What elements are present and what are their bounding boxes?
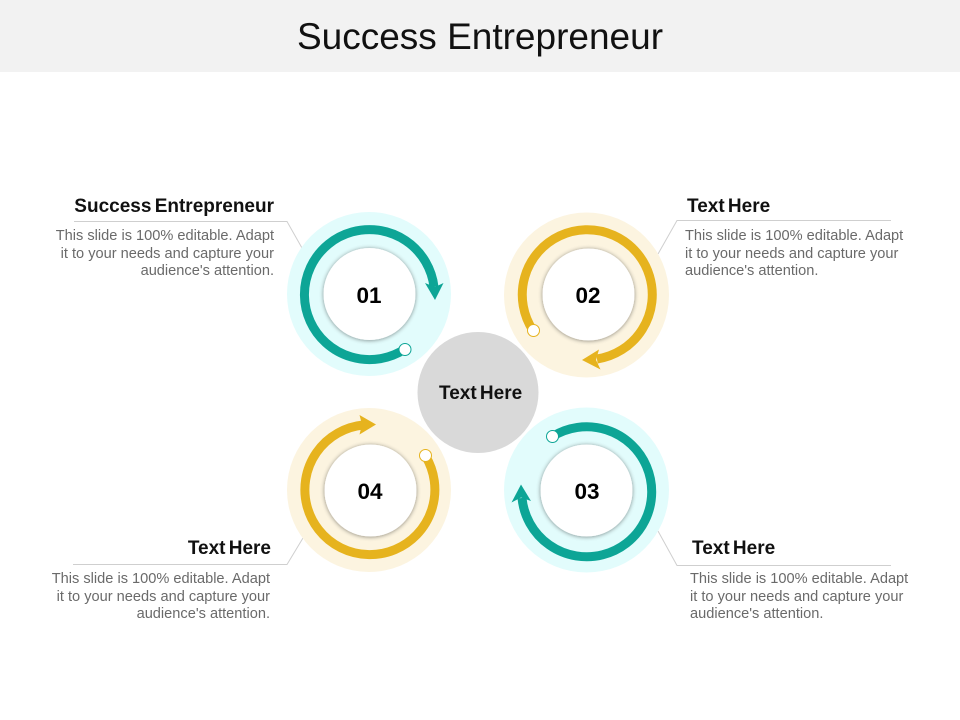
inner disc 03	[540, 444, 632, 536]
body: bottom left: This slide is 100% editable. Adapt	[52, 571, 270, 587]
body: top left: audience's attention.	[141, 263, 274, 279]
text block: top left	[56, 196, 274, 279]
arrow ring 03	[512, 427, 652, 557]
leader line: top right	[658, 220, 891, 254]
body: top right	[685, 228, 904, 279]
number 04: 04	[357, 479, 383, 504]
body: bottom left: audience's attention.	[137, 606, 270, 622]
ring dot 01	[399, 344, 411, 356]
inner disc 01	[324, 248, 416, 340]
step 02 circle	[504, 212, 669, 378]
text block: bottom left	[52, 538, 271, 622]
center circle	[418, 332, 538, 453]
ring dot 02	[528, 324, 540, 336]
body: bottom right: it to your needs and capture your	[690, 588, 903, 604]
heading: top right: Text Here	[687, 196, 770, 217]
body: bottom right: audience's attention.	[690, 606, 823, 622]
body: bottom right	[690, 571, 908, 622]
text block: top right	[685, 196, 904, 279]
body: top right: audience's attention.	[685, 263, 818, 279]
center label: Text Here	[439, 383, 522, 404]
leader line: bottom left	[73, 538, 303, 564]
body: top right: This slide is 100% editable. Adapt	[685, 228, 903, 244]
body: top right: it to your needs and capture your	[685, 246, 898, 262]
title banner	[0, 0, 960, 72]
ring dot 03	[546, 430, 558, 442]
arrow ring 02	[522, 230, 652, 370]
body: top left: it to your needs and capture your	[61, 246, 274, 262]
number 01: 01	[356, 283, 382, 308]
heading: bottom right: Text Here	[692, 538, 775, 559]
body: top left	[56, 228, 274, 279]
arrow ring 04	[305, 415, 435, 555]
body: bottom right: This slide is 100% editable. Adapt	[690, 571, 908, 587]
heading: top left: Success Entrepreneur	[74, 196, 274, 217]
step 03 circle	[504, 408, 669, 572]
leader line: bottom right	[658, 531, 891, 566]
inner disc 04	[324, 444, 416, 536]
body: top left: This slide is 100% editable. Adapt	[56, 228, 274, 244]
text block: bottom right	[690, 538, 908, 622]
step 04 circle	[287, 408, 451, 572]
inner disc 02	[542, 248, 634, 340]
step 01 circle	[287, 212, 451, 376]
heading: bottom left: Text Here	[188, 538, 271, 559]
arrow ring 01	[304, 230, 444, 360]
number 03: 03	[574, 479, 600, 504]
ring dot 04	[420, 450, 432, 462]
number 02: 02	[575, 283, 601, 308]
body: bottom left	[52, 571, 270, 622]
leader line: top left	[74, 222, 302, 248]
title: Success Entrepreneur	[297, 16, 663, 57]
body: bottom left: it to your needs and capture your	[57, 588, 270, 604]
